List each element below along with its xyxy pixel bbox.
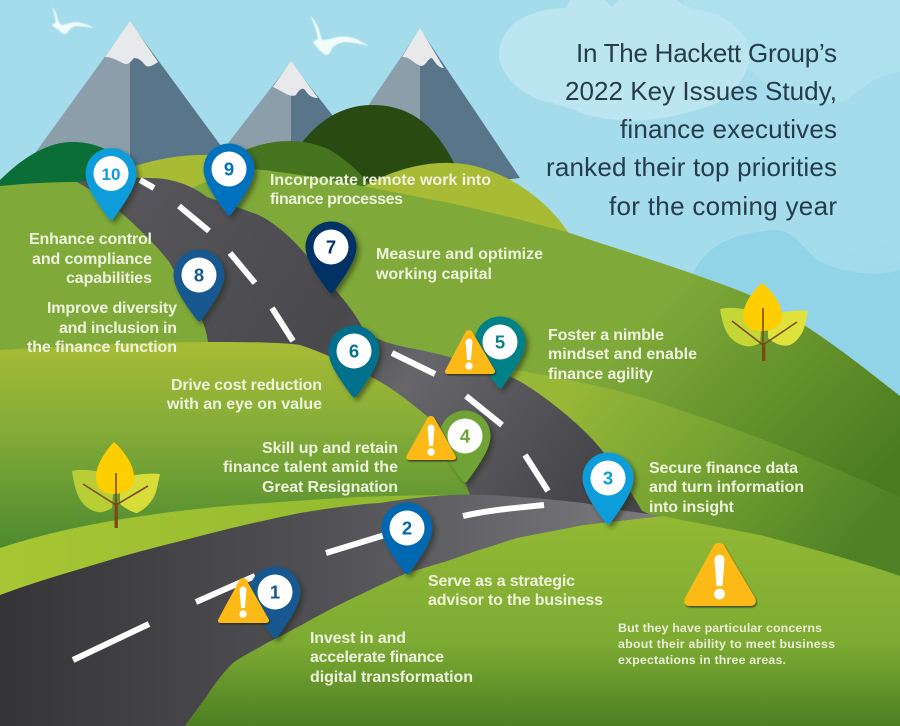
pin 7: 7 bbox=[326, 236, 336, 258]
label 9 bbox=[270, 172, 491, 208]
pin 2: 2 bbox=[402, 518, 412, 538]
label 1: accelerate finance bbox=[310, 649, 444, 666]
concerns note: expectations in three areas. bbox=[618, 653, 786, 667]
pin 6: 6 bbox=[349, 340, 359, 362]
label 10: capabilities bbox=[66, 270, 152, 287]
label 1: digital transformation bbox=[310, 669, 473, 686]
label 3: Secure finance data bbox=[649, 460, 798, 477]
pin 7 bbox=[306, 222, 356, 294]
pin 1: 1 bbox=[270, 582, 280, 602]
concerns note: But they have particular concerns bbox=[618, 621, 822, 635]
concerns note bbox=[618, 621, 835, 667]
mountain: middle bbox=[215, 61, 375, 170]
icon: bird right bbox=[310, 16, 369, 55]
label 5: Foster a nimble bbox=[548, 327, 664, 344]
label 9: Incorporate remote work into bbox=[270, 172, 491, 189]
label 7: working capital bbox=[375, 266, 492, 283]
headline: In The Hackett Group’s bbox=[576, 38, 837, 68]
label 6 bbox=[166, 377, 322, 413]
label 10 bbox=[29, 231, 152, 287]
concerns note: about their ability to meet business bbox=[618, 637, 835, 651]
label 4 bbox=[223, 440, 398, 496]
icon: warning on pin 1 bbox=[218, 578, 269, 623]
icon: warning on pin 4 bbox=[406, 416, 456, 460]
label 10: Enhance control bbox=[29, 231, 152, 248]
icon: bird left bbox=[52, 7, 94, 34]
label 8: and inclusion in bbox=[59, 320, 177, 337]
pin 1 bbox=[250, 566, 300, 638]
bright ribbon hill bbox=[0, 495, 455, 610]
label 8: Improve diversity bbox=[47, 300, 177, 317]
headline: finance executives bbox=[620, 114, 837, 144]
label 10: and compliance bbox=[32, 251, 152, 268]
middle right hill bbox=[450, 368, 900, 726]
pin 9: 9 bbox=[224, 158, 234, 180]
pin 8 bbox=[174, 250, 224, 322]
label 8 bbox=[27, 300, 177, 356]
pin 3: 3 bbox=[603, 468, 613, 488]
pin 10: 10 bbox=[102, 165, 120, 184]
label 4: Skill up and retain bbox=[262, 440, 398, 457]
pin 10 bbox=[86, 148, 136, 220]
label 1: Invest in and bbox=[310, 630, 406, 647]
pin 4: 4 bbox=[460, 426, 471, 446]
label 8: the finance function bbox=[27, 339, 177, 356]
headline bbox=[546, 38, 837, 221]
pin 5 bbox=[474, 316, 526, 388]
icon: warning on pin 5 bbox=[445, 330, 495, 374]
pin 9 bbox=[204, 144, 254, 216]
upper road bbox=[77, 178, 663, 560]
label 4: Great Resignation bbox=[262, 479, 398, 496]
label 3: into insight bbox=[649, 499, 735, 516]
label 3 bbox=[649, 460, 804, 516]
front hill bbox=[185, 516, 900, 726]
icon: large warning bbox=[684, 543, 756, 606]
road dashes bbox=[73, 180, 548, 660]
big green hill bbox=[0, 168, 900, 726]
pin 2 bbox=[382, 502, 432, 574]
label 3: and turn information bbox=[649, 479, 804, 496]
front left hill bbox=[0, 342, 470, 620]
label 2: advisor to the business bbox=[428, 592, 603, 609]
pin 4 bbox=[440, 410, 490, 482]
label 1 bbox=[310, 630, 473, 686]
clouds bbox=[499, 0, 900, 420]
pin 6 bbox=[328, 326, 380, 398]
lower road bbox=[0, 495, 663, 726]
label 2: Serve as a strategic bbox=[428, 573, 575, 590]
mountain: left bbox=[30, 21, 235, 170]
icon: tree left bbox=[72, 442, 160, 528]
label 6: with an eye on value bbox=[166, 396, 322, 413]
headline: 2022 Key Issues Study, bbox=[565, 76, 837, 106]
mountain: right bbox=[355, 28, 520, 190]
label 5: finance agility bbox=[548, 366, 653, 383]
pin 5: 5 bbox=[495, 332, 505, 352]
label 9: finance processes bbox=[270, 191, 403, 208]
label 6: Drive cost reduction bbox=[171, 377, 322, 394]
pin 3 bbox=[582, 452, 634, 524]
label 2 bbox=[428, 573, 603, 609]
pin 8: 8 bbox=[194, 264, 204, 286]
label 5 bbox=[548, 327, 697, 383]
headline: for the coming year bbox=[609, 191, 837, 221]
label 7: Measure and optimize bbox=[376, 246, 543, 263]
dark hills behind bbox=[0, 105, 568, 240]
mountains bbox=[30, 21, 520, 190]
label 5: mindset and enable bbox=[548, 346, 697, 363]
icon: tree right bbox=[720, 283, 808, 361]
label 4: finance talent amid the bbox=[223, 459, 398, 476]
headline: ranked their top priorities bbox=[546, 152, 837, 182]
label 7 bbox=[375, 246, 543, 283]
